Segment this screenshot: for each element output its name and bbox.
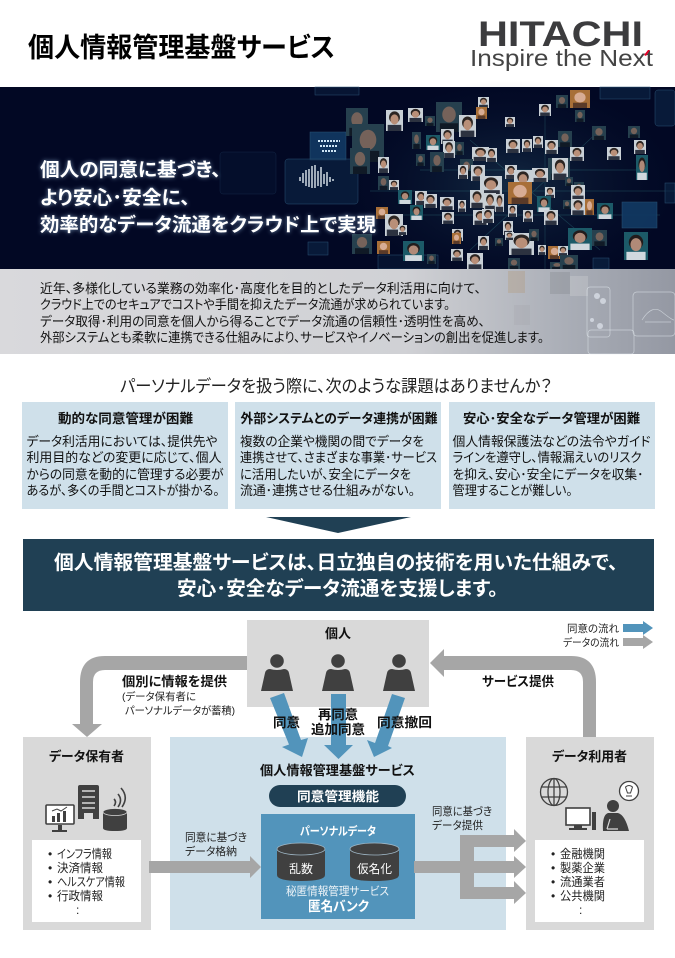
- label: data storage: [185, 831, 247, 858]
- arrow: data provision branches: [414, 829, 526, 904]
- panel: challenge 2: 複数の企業や機関の間でデータを: [240, 434, 424, 449]
- list: data types held: •: [48, 861, 52, 875]
- label: re-consent and additional consent: 再同意: [318, 707, 358, 722]
- list: data user types: •: [551, 847, 555, 861]
- legend: 同意の流れ: [567, 623, 620, 635]
- panel: challenge 3: を抑え、安心･安全にデータを収集･: [452, 467, 644, 482]
- label: service provision: サービス提供: [482, 674, 554, 689]
- panel: challenge 3: ラインを遵守し、情報漏えいのリスク: [452, 450, 642, 465]
- list: data user types: •: [551, 861, 555, 875]
- panel: challenge 2: に活用したいが、安全にデータを: [240, 467, 411, 482]
- hero headline: より安心･安全に、: [40, 187, 190, 209]
- icon: Hitachi logo: HITACHI: [478, 15, 643, 54]
- list: data user types: :: [579, 903, 582, 917]
- panel: data user: [526, 737, 654, 930]
- personal data box: パーソナルデータ: [300, 824, 376, 838]
- intro text: クラウド上でのセキュアでコストや手間を抑えたデータ流通が求められています。: [40, 297, 450, 312]
- panel: challenge 1: 利用目的などの変更に応じて、個人: [26, 450, 222, 465]
- list: data types held: [32, 840, 141, 922]
- list: data types held: ヘルスケア情報: [57, 875, 125, 889]
- panel: individuals: [247, 620, 429, 707]
- panel: challenge 3: 管理することが難しい。: [452, 483, 572, 498]
- label: data provision: [432, 805, 492, 832]
- intro text: データ取得･利用の同意を個人から得ることでデータ流通の信頼性･透明性を高め、: [40, 314, 485, 329]
- list: data user types: 公共機関: [560, 889, 605, 903]
- icon: three people: [261, 654, 415, 691]
- arrow: re-consent: [324, 694, 353, 759]
- panel: data holder: [23, 737, 151, 930]
- list: data types held: 決済情報: [57, 861, 103, 875]
- arrow: provide information to data holder: [72, 656, 247, 737]
- label: data storage: データ格納: [185, 844, 237, 858]
- list: data types held: :: [76, 903, 79, 917]
- personal data box: [261, 814, 415, 919]
- list: data user types: •: [551, 875, 555, 889]
- panel: challenge 3: [449, 402, 655, 509]
- personal data box: 秘匿情報管理サービス: [286, 884, 389, 898]
- intro text: 外部システムとも柔軟に連携できる仕組みにより、サービスやイノベーションの創出を促進します。: [40, 330, 544, 345]
- label: data provision: データ提供: [432, 818, 483, 832]
- panel: challenge 1: からの同意を動的に管理する必要が: [26, 467, 224, 482]
- label: individual provision: パーソナルデータが蓄積): [125, 704, 235, 717]
- list: data user types: 金融機関: [560, 847, 605, 861]
- intro text: [40, 281, 544, 345]
- icon: Hitachi logo: Inspire the Next: [470, 45, 654, 71]
- dashboard panels: [220, 87, 675, 269]
- panel: challenge 1: [22, 402, 228, 509]
- label: consent withdrawal: 同意撤回: [377, 715, 432, 730]
- panel: challenge 2: 連携させて、さまざまな事業･サービス: [240, 450, 437, 465]
- legend: [563, 621, 653, 649]
- panel: individuals: 個人: [325, 626, 351, 641]
- icon: Hitachi logo: [470, 15, 654, 71]
- label: re-consent and additional consent: 追加同意: [311, 722, 365, 737]
- label: data provision: 同意に基づき: [432, 805, 492, 818]
- solution banner: 個人情報管理基盤サービスは、日立独自の技術を用いた仕組みで、: [54, 551, 618, 574]
- list: data user types: [535, 840, 644, 922]
- label: data storage: 同意に基づき: [185, 831, 247, 844]
- solution banner: [23, 539, 654, 611]
- panel: data user: データ利用者: [552, 749, 627, 764]
- hero banner image: [0, 80, 675, 290]
- arrow: down to solution: [266, 517, 411, 533]
- arrow: consent: [270, 693, 308, 757]
- intro text: 近年、多様化している業務の効率化･高度化を目的としたデータ利活用に向けて、: [40, 281, 481, 296]
- solution banner: 安心･安全なデータ流通を支援します。: [177, 577, 498, 600]
- panel: personal information platform service: [170, 737, 506, 930]
- hero headline: 効率的なデータ流通をクラウド上で実現: [40, 213, 376, 236]
- panel: challenge 2: 外部システムとのデータ連携が困難: [240, 411, 438, 426]
- icon: data holder systems: [46, 785, 127, 832]
- consent management pill: 同意管理機能: [297, 789, 379, 804]
- list: data user types: •: [551, 889, 555, 903]
- label: individual provision: (データ保有者に: [122, 690, 196, 703]
- hero headline: 個人の同意に基づき、: [40, 159, 221, 181]
- icon: data user with globe and computer: [540, 778, 638, 831]
- list: data types held: •: [48, 847, 52, 861]
- label: individual provision: 個別に情報を提供: [122, 674, 227, 689]
- panel: challenge 1: データ利活用においては、提供先や: [26, 434, 218, 449]
- panel: challenge 3: 個人情報保護法などの法令やガイド: [452, 434, 651, 449]
- cylinder: random numbers: [277, 843, 325, 881]
- face tiles: [346, 90, 648, 269]
- panel: challenge 2: [235, 402, 441, 509]
- intro strip with text: [0, 269, 675, 354]
- panel: challenge 3: 安心･安全なデータ管理が困難: [463, 411, 640, 426]
- consent management pill: [269, 785, 406, 807]
- label: individual provision: [122, 674, 235, 717]
- list: data user types: 流通業者: [560, 875, 605, 889]
- list: data types held: •: [48, 875, 52, 889]
- cylinder: pseudonymization: [350, 843, 399, 881]
- arrow: service to individuals: [430, 649, 596, 737]
- panel: challenge 1: あるが、多くの手間とコストが掛かる。: [26, 483, 220, 498]
- list: data types held: インフラ情報: [57, 847, 112, 861]
- legend: データの流れ: [563, 636, 620, 649]
- section question heading: パーソナルデータを扱う際に、次のような課題はありませんか？: [120, 376, 552, 396]
- list: data user types: 製薬企業: [560, 861, 605, 875]
- arrow: consent withdrawal: [367, 694, 405, 757]
- personal data box: 匿名バンク: [308, 898, 369, 914]
- cylinder: random numbers: 乱数: [289, 861, 313, 876]
- label: consent: 同意: [273, 715, 300, 730]
- panel: personal information platform service: 個人情報管理基盤サービス: [260, 763, 415, 778]
- page title: 個人情報管理基盤サービス: [28, 33, 335, 63]
- list: data types held: 行政情報: [57, 889, 103, 903]
- arrow: data storage: [149, 856, 261, 878]
- panel: challenge 1: 動的な同意管理が困難: [58, 411, 193, 426]
- panel: data holder: データ保有者: [49, 749, 124, 764]
- list: data types held: •: [48, 889, 52, 903]
- panel: challenge 2: 流通･連携させる仕組みがない。: [240, 483, 415, 498]
- cylinder: pseudonymization: 仮名化: [357, 861, 392, 876]
- label: re-consent and additional consent: [311, 707, 365, 737]
- hero headline: [40, 159, 376, 236]
